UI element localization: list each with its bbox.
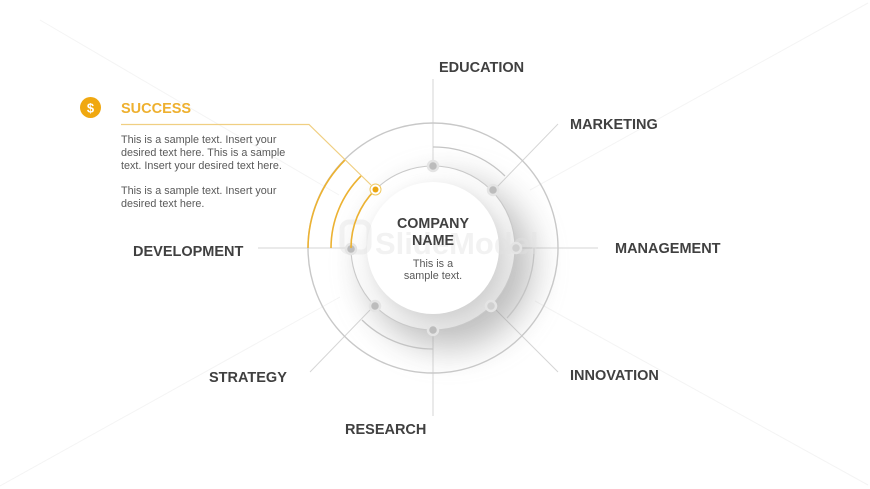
center text: sample text. [404,270,462,282]
center text: This is a [413,258,453,270]
icon: dollar coin: $ [87,100,95,116]
success description: desired text here. This is a sample [121,147,285,159]
yellow callout line [121,124,371,185]
label: development: DEVELOPMENT [133,244,244,260]
label: innovation: INNOVATION [570,368,659,384]
label: strategy: STRATEGY [209,370,287,386]
center text [404,258,462,282]
success description [121,134,285,210]
outer ring [308,123,558,373]
node markers [346,161,521,335]
yellow arcs [308,160,375,248]
yellow node [370,184,381,195]
connector lines [258,79,598,416]
center title [397,216,469,249]
center title: COMPANY [397,216,469,232]
heading: success: SUCCESS [121,101,191,117]
central disc shadow [365,180,533,348]
icon: dollar coin [80,97,101,118]
label: marketing: MARKETING [570,117,658,133]
success description: This is a sample text. Insert your [121,134,277,146]
middle arcs [362,147,534,349]
label: management: MANAGEMENT [615,241,721,257]
central disc [351,166,515,330]
label: education: EDUCATION [439,60,524,76]
success description: text. Insert your desired text here. [121,160,282,172]
watermark: SlideModel [375,226,539,261]
success description: This is a sample text. Insert your [121,185,277,197]
label: research: RESEARCH [345,422,426,438]
center title: NAME [412,233,454,249]
success description: desired text here. [121,198,204,210]
